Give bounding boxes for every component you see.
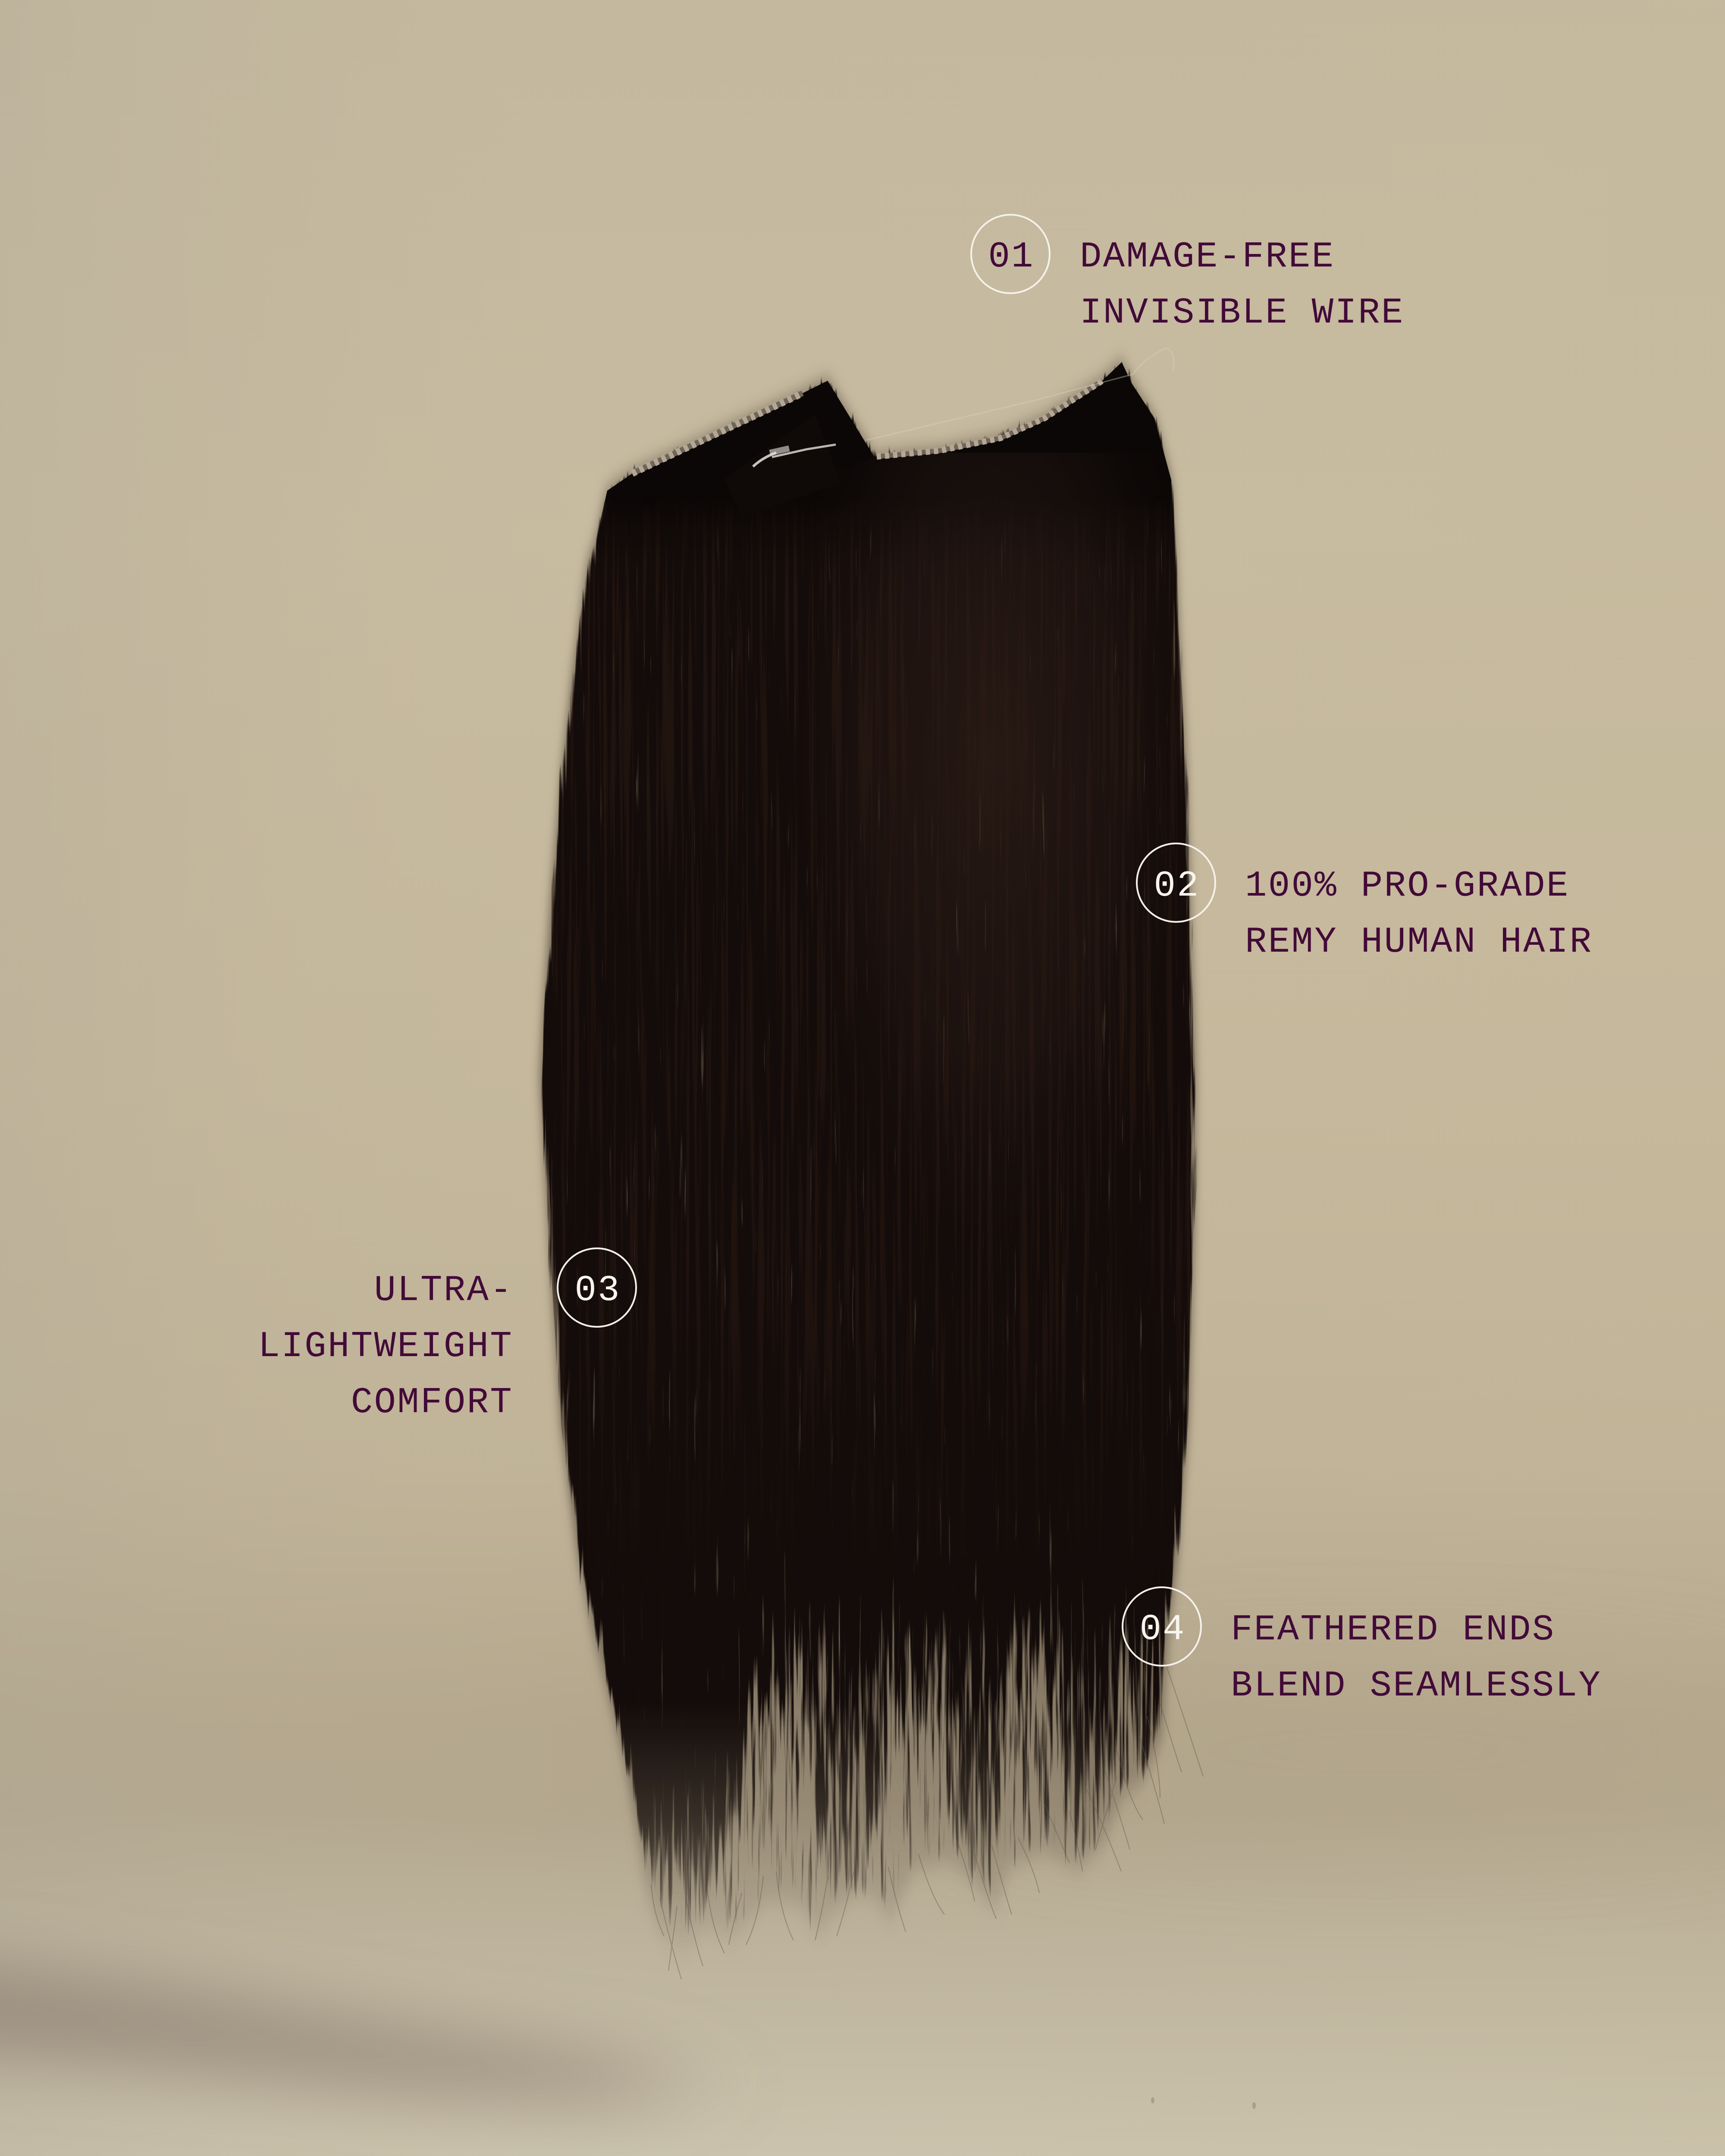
label 04: FEATHERED ENDS — [1231, 1610, 1556, 1651]
hair fade wrapper — [540, 362, 1195, 1960]
invisible wire — [866, 348, 1174, 440]
hair extension — [518, 348, 1229, 1979]
callout 01 — [971, 215, 1405, 334]
floor shadow — [0, 1949, 673, 2104]
chain left — [632, 393, 803, 473]
clip tab — [733, 381, 874, 509]
callout 02 — [1137, 843, 1593, 963]
loose wisps — [651, 1660, 1203, 1979]
label 03: ULTRA- — [374, 1270, 513, 1311]
callout 03 — [258, 1248, 636, 1423]
brown sheen — [518, 453, 1208, 1531]
dense clumps — [811, 1595, 1169, 1932]
clip highlight — [753, 445, 836, 467]
label 03: LIGHTWEIGHT — [258, 1326, 513, 1367]
badge 03: 03 — [574, 1270, 621, 1311]
label 02: REMY HUMAN HAIR — [1245, 922, 1593, 963]
label 01: INVISIBLE WIRE — [1080, 293, 1405, 334]
badge 01 — [971, 215, 1050, 293]
chain right — [877, 381, 1102, 457]
body strands — [518, 496, 1229, 1595]
badge 04: 04 — [1139, 1609, 1186, 1650]
badge 02 — [1137, 843, 1215, 922]
label 04 — [1231, 1610, 1602, 1707]
label 01: DAMAGE-FREE — [1080, 237, 1335, 278]
label 02: 100% PRO-GRADE — [1245, 866, 1570, 907]
floor specks — [1151, 2097, 1256, 2109]
label 03 — [258, 1270, 513, 1423]
clip window — [724, 414, 841, 517]
hair density body and strands — [540, 362, 1195, 1960]
left dense column — [594, 1595, 746, 1927]
label 02 — [1245, 866, 1593, 963]
badge 04 — [1123, 1587, 1201, 1666]
label 03: COMFORT — [351, 1382, 513, 1423]
label 04: BLEND SEAMLESSLY — [1231, 1666, 1602, 1707]
weft top — [593, 362, 1176, 569]
badge 01: 01 — [988, 237, 1035, 278]
label 01 — [1080, 237, 1405, 334]
badge 03 — [558, 1248, 636, 1327]
badge 02: 02 — [1154, 866, 1200, 907]
callout 04 — [1123, 1587, 1602, 1707]
